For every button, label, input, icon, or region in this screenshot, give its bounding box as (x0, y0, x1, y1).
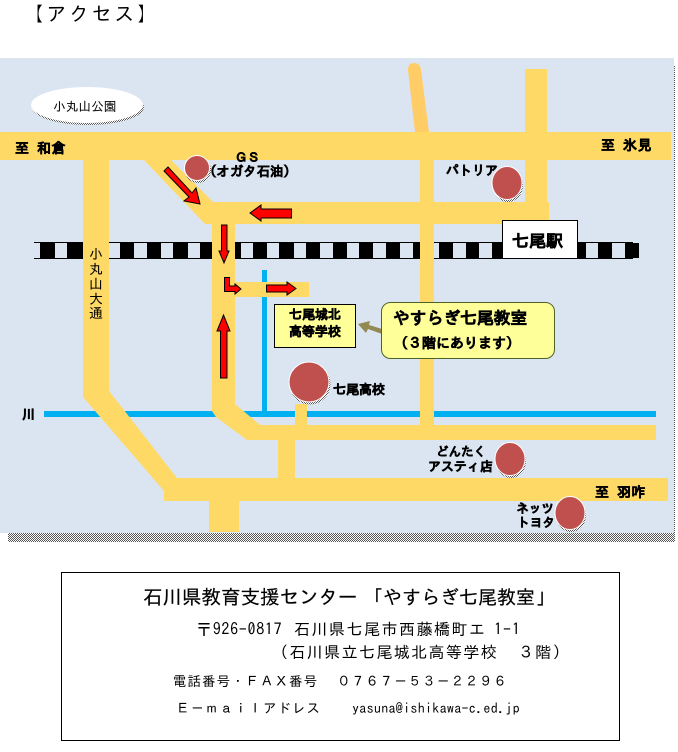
road label: 小丸山大通: 丸 (89, 262, 103, 276)
address: 1-1 (494, 621, 521, 637)
panel: map (0, 58, 675, 542)
landmark: どんたく アスティ店: アスティ店 (428, 459, 493, 473)
road label: 小丸山大通: 通 (89, 306, 103, 320)
arrow: turn right (224, 278, 241, 294)
station box: 七尾駅 (512, 233, 564, 250)
phone: 電話番号・ＦＡＸ番号 (173, 674, 318, 688)
pointer arrow (358, 321, 382, 334)
contact heading: 」 (536, 588, 555, 607)
arrow: right (266, 282, 296, 295)
contact heading: 石川県教育支援センター (143, 587, 358, 607)
landmark: GS: （オガタ石油） (203, 164, 297, 178)
arrow: up (217, 315, 230, 378)
railway (34, 242, 639, 259)
school floor: （石川県立七尾城北高等学校 (272, 644, 498, 660)
road label: 至 羽咋: 至 羽咋 (595, 485, 646, 499)
contact heading (143, 587, 555, 607)
park ellipse (31, 87, 144, 125)
road label: 小丸山大通: 大 (89, 292, 103, 306)
roads (0, 63, 671, 532)
phone: ０７６７－５３－２２９６ (337, 674, 507, 688)
callout: やすらぎ七尾教室 (393, 309, 527, 327)
road label: 小丸山大通: 山 (89, 277, 103, 291)
arrows (164, 167, 296, 378)
map shadow (8, 65, 675, 542)
road label: 至 氷見: 至 氷見 (601, 137, 652, 152)
school floor: ３階） (518, 644, 570, 660)
arrow: down (219, 225, 229, 263)
road label: 至 和倉: 至 和倉 (15, 140, 66, 155)
school box: 七尾城北 (289, 307, 341, 321)
callout: （３階にあります） (394, 335, 520, 350)
email: yasuna@ishikawa-c.ed.jp (352, 701, 520, 715)
email (176, 701, 520, 715)
panel: contact (62, 572, 620, 740)
landmark: GS: ＧＳ (235, 151, 260, 164)
landmark: ネッツトヨタ (516, 496, 586, 532)
address: 石川県七尾市西藤橋町エ (294, 621, 486, 637)
station box (502, 220, 578, 258)
email: Ｅ－ｍａｉｌアドレス (176, 701, 321, 715)
landmark: ネッツトヨタ: ネッツ (516, 502, 554, 515)
landmark: どんたく アスティ店 (428, 442, 526, 478)
landmark: パトリア (446, 163, 523, 202)
park ellipse: 小丸山公園 (53, 100, 116, 113)
landmark: パトリア: パトリア (446, 163, 498, 177)
school box (274, 304, 356, 348)
address (196, 621, 521, 637)
road label: 小丸山大通 (89, 247, 103, 320)
title: 【アクセス】 (24, 4, 160, 24)
school box: 高等学校 (289, 324, 341, 338)
landmark: GS (184, 151, 297, 183)
landmark: 七尾高校: 七尾高校 (333, 382, 385, 396)
phone (173, 674, 507, 688)
landmark: 七尾高校 (289, 362, 385, 404)
contact heading: 「 (364, 588, 383, 607)
address: 〒926-0817 (196, 621, 282, 637)
arrow: diagonal down (164, 167, 200, 204)
label: river: 川 (22, 408, 35, 421)
river (44, 270, 656, 417)
callout (382, 302, 554, 358)
landmark: ネッツトヨタ: トヨタ (517, 516, 555, 529)
road label: 小丸山大通: 小 (89, 247, 103, 261)
map background (0, 58, 674, 533)
contact heading: やすらぎ七尾教室 (383, 588, 535, 607)
landmark: どんたく アスティ店: どんたく (436, 445, 486, 458)
arrow: left (250, 205, 292, 221)
